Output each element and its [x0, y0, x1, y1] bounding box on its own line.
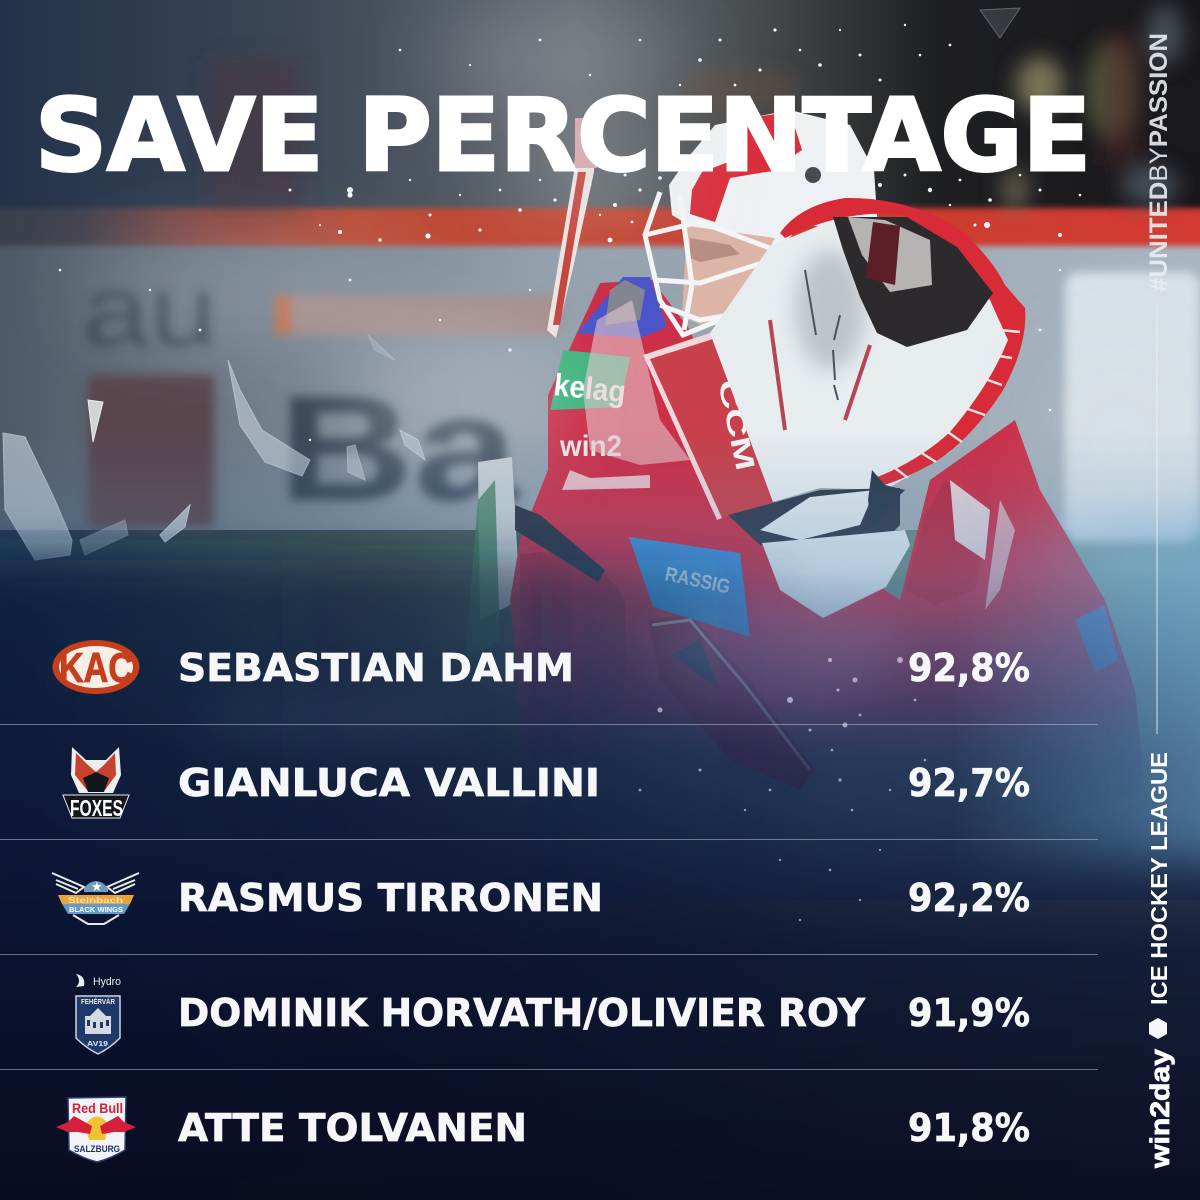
player name: SEBASTIAN DAHM	[178, 646, 574, 690]
smoke and ice spray	[3, 8, 1200, 580]
glove	[643, 198, 1025, 618]
icon: hexagon	[1149, 1018, 1167, 1039]
logo: Black Wings: ★	[91, 879, 103, 894]
player name: RASMUS TIRRONEN	[178, 876, 603, 920]
sponsor: kelag	[550, 350, 630, 410]
sponsor logo: win2day: win2day	[1145, 1049, 1175, 1169]
face	[682, 226, 775, 327]
value: 92,7%	[908, 761, 1030, 805]
row: Rasmus Tirronen	[52, 873, 1030, 924]
goalkeeper photo	[465, 110, 1145, 830]
logo: Fehervar: FEHÉRVÁR	[81, 997, 115, 1006]
row: Gianluca Vallini	[63, 747, 1030, 821]
player name: DOMINIK HORVATH/OLIVIER ROY	[178, 991, 865, 1035]
logo: Foxes: FOXES	[70, 795, 123, 821]
player name: GIANLUCA VALLINI	[178, 761, 600, 805]
sponsor: blue panel	[629, 537, 750, 637]
logo: Fehervar	[76, 974, 121, 1054]
value: 91,8%	[908, 1106, 1030, 1150]
row: Sebastian Dahm	[52, 640, 1030, 694]
logo: Red Bull Salzburg: SALZBURG	[74, 1144, 120, 1154]
logo: Red Bull Salzburg: Red Bull	[72, 1101, 123, 1116]
logo: Black Wings: BLACK WINGS	[69, 905, 123, 914]
helmet	[669, 110, 878, 250]
title: SAVE PERCENTAGE	[35, 77, 1091, 194]
value: 92,2%	[908, 876, 1030, 920]
logo: Fehervar: AV19	[87, 1041, 108, 1048]
row: Dominik Horvath / Olivier Roy	[76, 974, 1030, 1054]
logo: Fehervar: Hydro	[93, 976, 121, 988]
player name: ATTE TOLVANEN	[178, 1106, 527, 1150]
logo: Red Bull Salzburg	[56, 1097, 136, 1162]
side text: league: ICE HOCKEY LEAGUE	[1146, 752, 1172, 1005]
sponsor: kelag: kelag	[552, 367, 628, 409]
value: 91,9%	[908, 991, 1030, 1035]
background photo: arena: Ba	[278, 364, 520, 532]
blue and navy overlays	[0, 430, 1200, 1200]
glove: CCM	[712, 377, 761, 473]
mask cage	[645, 192, 775, 335]
value: 92,8%	[908, 646, 1030, 690]
logo: Black Wings	[52, 873, 139, 924]
sponsor: blue panel: RASSIG	[663, 563, 732, 599]
logo: Black Wings: Steinbach	[68, 896, 123, 905]
logo: KAC: KAC	[59, 644, 133, 691]
row: Atte Tolvanen	[56, 1097, 1030, 1162]
side text: hashtag: #UNITEDBYPASSION	[1145, 33, 1173, 292]
sponsor: win2day chest: win2	[559, 430, 622, 463]
background photo: arena: au	[82, 255, 217, 367]
logo: Foxes	[63, 747, 129, 821]
